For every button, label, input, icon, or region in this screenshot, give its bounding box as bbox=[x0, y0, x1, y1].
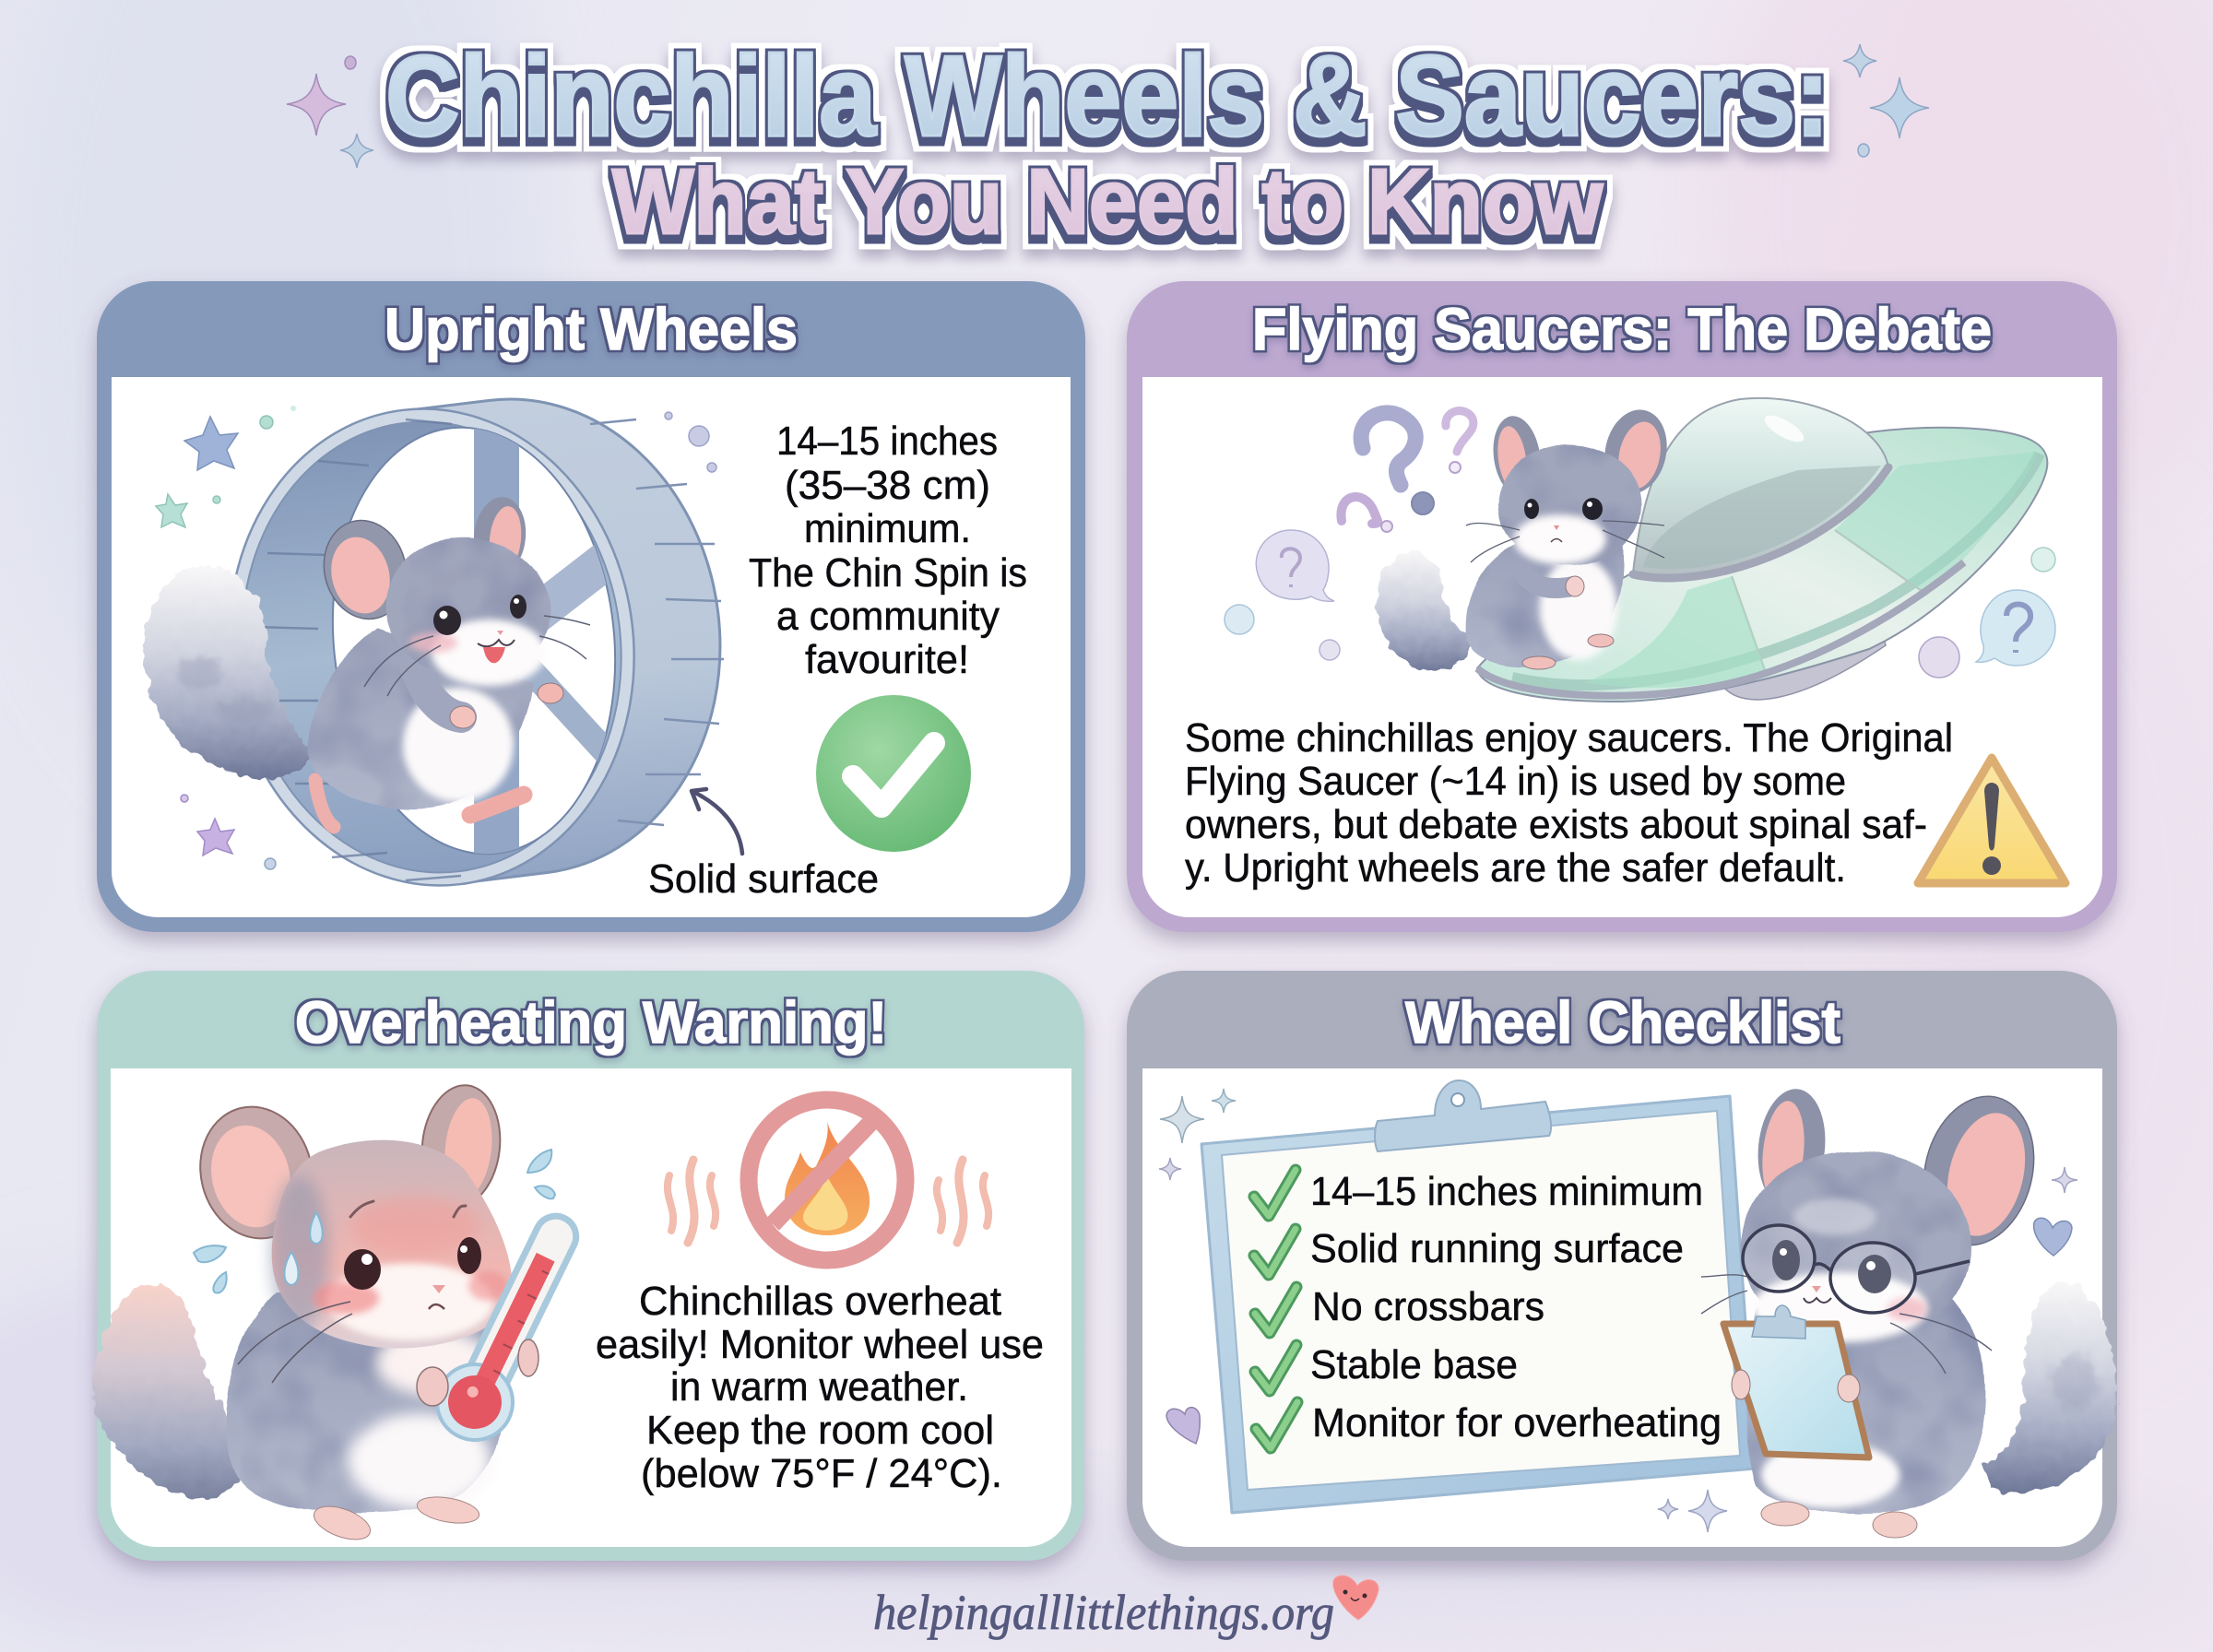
text: saucer debate: Some chinchillas enjoy saucers. The Original bbox=[1185, 715, 1953, 761]
text: checklist items: No crossbars bbox=[1312, 1284, 1544, 1329]
text: overheating advice bbox=[596, 1279, 1044, 1496]
text: wheel size: favourite! bbox=[805, 637, 969, 682]
icon: green checks bbox=[1254, 1170, 1297, 1448]
icon: stars and dots bbox=[156, 406, 716, 869]
tail bbox=[92, 1283, 245, 1498]
icon: speech bubbles and orbs bbox=[1225, 530, 2055, 678]
text: saucer debate bbox=[1185, 715, 1953, 891]
text: saucer debate: y. Upright wheels are the safer default. bbox=[1185, 845, 1846, 891]
text: saucer debate: owners, but debate exists about spinal saf- bbox=[1185, 802, 1927, 847]
text: checklist items: Stable base bbox=[1310, 1342, 1518, 1387]
title bbox=[385, 33, 1829, 254]
text: wheel size: The Chin Spin is bbox=[749, 550, 1027, 596]
illustration: worried chinchilla bbox=[1376, 404, 1675, 671]
text: checklist items: Monitor for overheating bbox=[1312, 1400, 1722, 1446]
icon: small clipboard bbox=[1723, 1305, 1869, 1457]
text: wheel size: minimum. bbox=[804, 506, 971, 551]
icon: paws on thermometer bbox=[417, 1339, 538, 1406]
tail bbox=[144, 566, 312, 779]
text: wheel size bbox=[749, 419, 1027, 682]
text: overheating advice: Keep the room cool bbox=[646, 1408, 994, 1453]
text: wheel size: (35–38 cm) bbox=[785, 463, 990, 508]
icon: no fire bbox=[749, 1100, 905, 1260]
icon: green check bbox=[816, 695, 971, 852]
text: checklist items: 14–15 inches minimum bbox=[1310, 1169, 1703, 1214]
illustration: clipboard bbox=[1201, 1080, 1756, 1513]
illustration: overheated chinchilla bbox=[92, 1081, 513, 1546]
text: overheating advice: Chinchillas overheat bbox=[639, 1279, 1001, 1324]
text: checklist items bbox=[1310, 1169, 1722, 1446]
illustration: flying saucer bbox=[1477, 398, 2047, 702]
text: overheating advice: in warm weather. bbox=[670, 1364, 968, 1410]
icon: thermometer bbox=[424, 1201, 598, 1453]
panel: wheel checklist bbox=[1127, 971, 2117, 1561]
subtitle text: What You Need to Know bbox=[612, 150, 1603, 254]
tail bbox=[1982, 1282, 2117, 1493]
panel: overheating warning bbox=[92, 971, 1084, 1561]
illustration: running chinchilla bbox=[144, 494, 590, 827]
icon: warning triangle bbox=[1918, 758, 2065, 883]
text: wheel size: 14–15 inches bbox=[776, 419, 998, 464]
icon: smiling heart bbox=[1333, 1575, 1379, 1620]
icon: title sparkles bbox=[287, 44, 1929, 168]
tail bbox=[1376, 552, 1474, 671]
illustration: hamster wheel bbox=[235, 398, 724, 887]
heading: upright wheels: Upright Wheels bbox=[385, 296, 798, 362]
illustration: chinchilla with glasses bbox=[1701, 1084, 2117, 1538]
panel: upright wheels bbox=[97, 281, 1085, 932]
icon: sweat drops bbox=[194, 1150, 555, 1293]
arrow: solid surface bbox=[692, 789, 742, 854]
heading: flying saucers: Flying Saucers: The Debate bbox=[1252, 296, 1992, 362]
text: saucer debate: Flying Saucer (~14 in) is used by some bbox=[1185, 759, 1846, 804]
text: overheating advice: easily! Monitor wheel use bbox=[596, 1322, 1044, 1367]
icon: question marks bbox=[1341, 411, 1473, 532]
heading: wheel checklist: Wheel Checklist bbox=[1405, 989, 1840, 1056]
heading: overheating warning: Overheating Warning! bbox=[295, 989, 887, 1056]
icon: heat waves bbox=[668, 1160, 988, 1243]
label: solid surface: Solid surface bbox=[648, 856, 879, 902]
text: checklist items: Solid running surface bbox=[1310, 1226, 1684, 1271]
main title text: Chinchilla Wheels & Saucers: bbox=[385, 33, 1829, 160]
text: overheating advice: (below 75°F / 24°C). bbox=[641, 1451, 1002, 1496]
icon: sparkles and hearts bbox=[1159, 1089, 2077, 1532]
footer: website: helpingalllittlethings.org bbox=[873, 1585, 1334, 1640]
text: wheel size: a community bbox=[776, 594, 1000, 639]
panel: flying saucers bbox=[1127, 281, 2117, 932]
